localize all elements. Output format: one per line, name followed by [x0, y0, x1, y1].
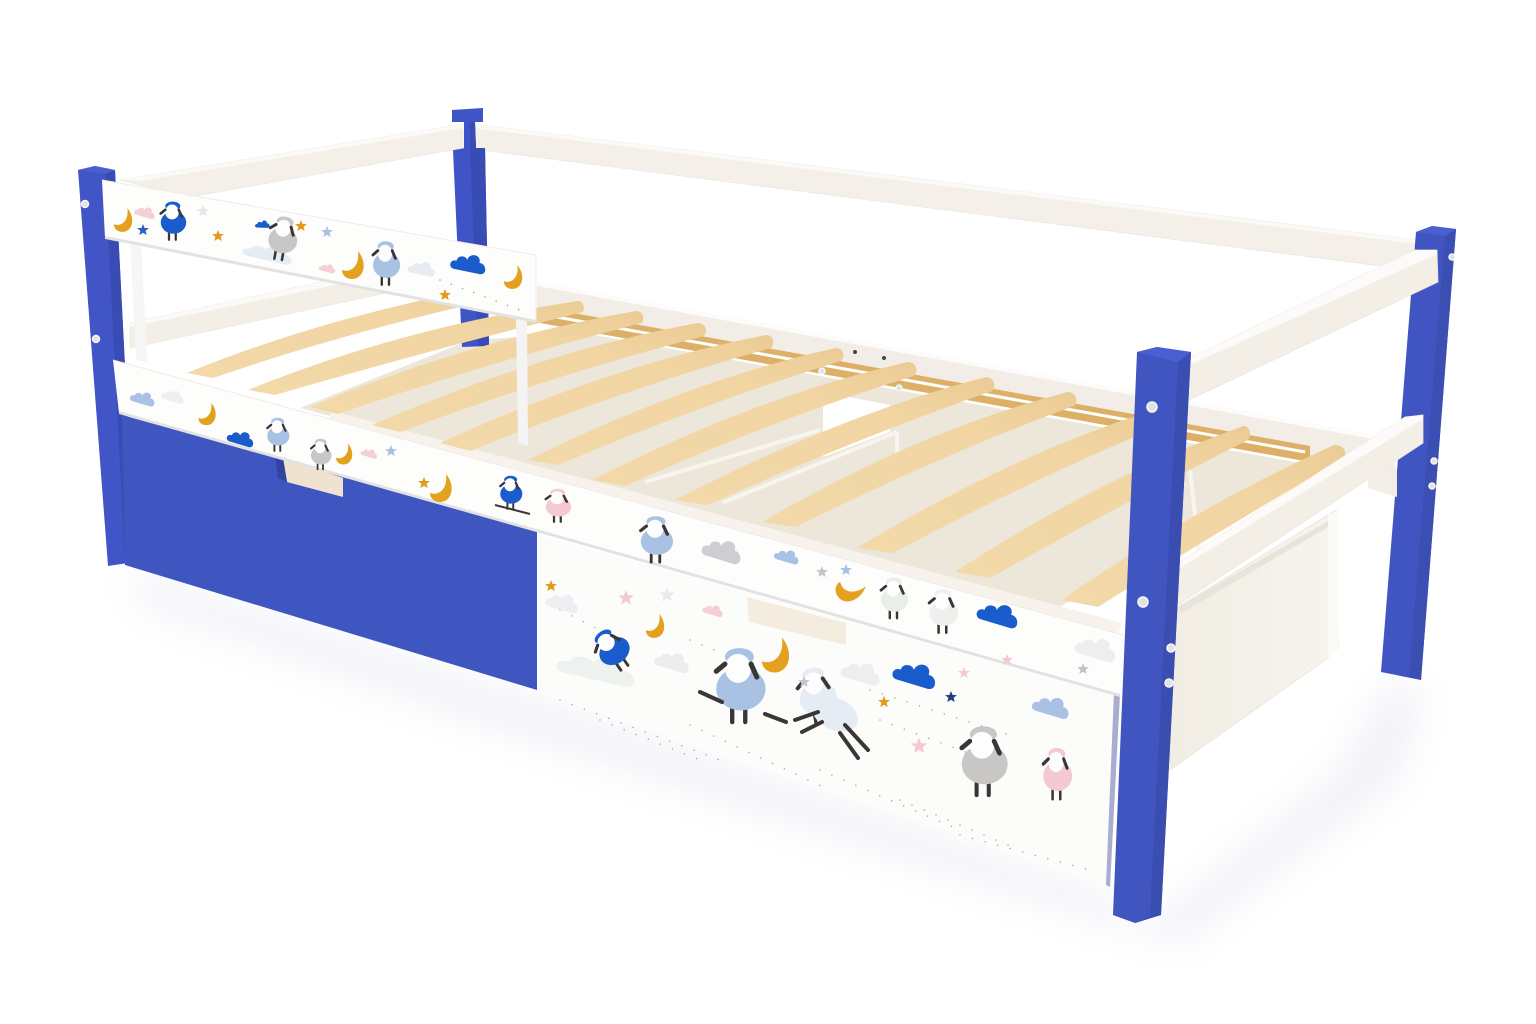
floor shadow [130, 570, 1425, 945]
back left post [452, 108, 489, 347]
slat holder strip [540, 307, 1310, 462]
drawer handle notch [747, 597, 846, 645]
upper right rail [1185, 250, 1438, 402]
drawer decoration: sheep and clouds [544, 580, 1072, 799]
front right post [1113, 347, 1191, 923]
upper left rail [120, 124, 463, 197]
inner side of front rail [330, 416, 1120, 628]
white drawer [537, 535, 1120, 887]
lower left rail [130, 280, 400, 348]
lower right rail [1175, 415, 1423, 607]
guard decoration [114, 202, 525, 312]
screw holes in back rail [853, 350, 886, 360]
back right post [1381, 226, 1456, 680]
safety guard with print [102, 180, 536, 323]
bolts [82, 200, 1455, 687]
drawer handle notch [283, 458, 343, 497]
front rail decoration [129, 387, 1119, 674]
drawer decoration: dots [560, 610, 1090, 870]
wooden slats [187, 285, 1346, 607]
left guard post [130, 236, 147, 362]
back top rail [473, 124, 1418, 270]
drawer inner edges [645, 430, 1200, 560]
right drawer side [1170, 510, 1338, 770]
drawer interior seen under slats [300, 333, 1300, 628]
right guard post [516, 318, 528, 446]
front left post [78, 166, 135, 566]
gap between drawers [823, 392, 890, 457]
blue drawer [122, 415, 537, 690]
back side rail [537, 282, 1397, 497]
front rail with print [113, 360, 1127, 697]
